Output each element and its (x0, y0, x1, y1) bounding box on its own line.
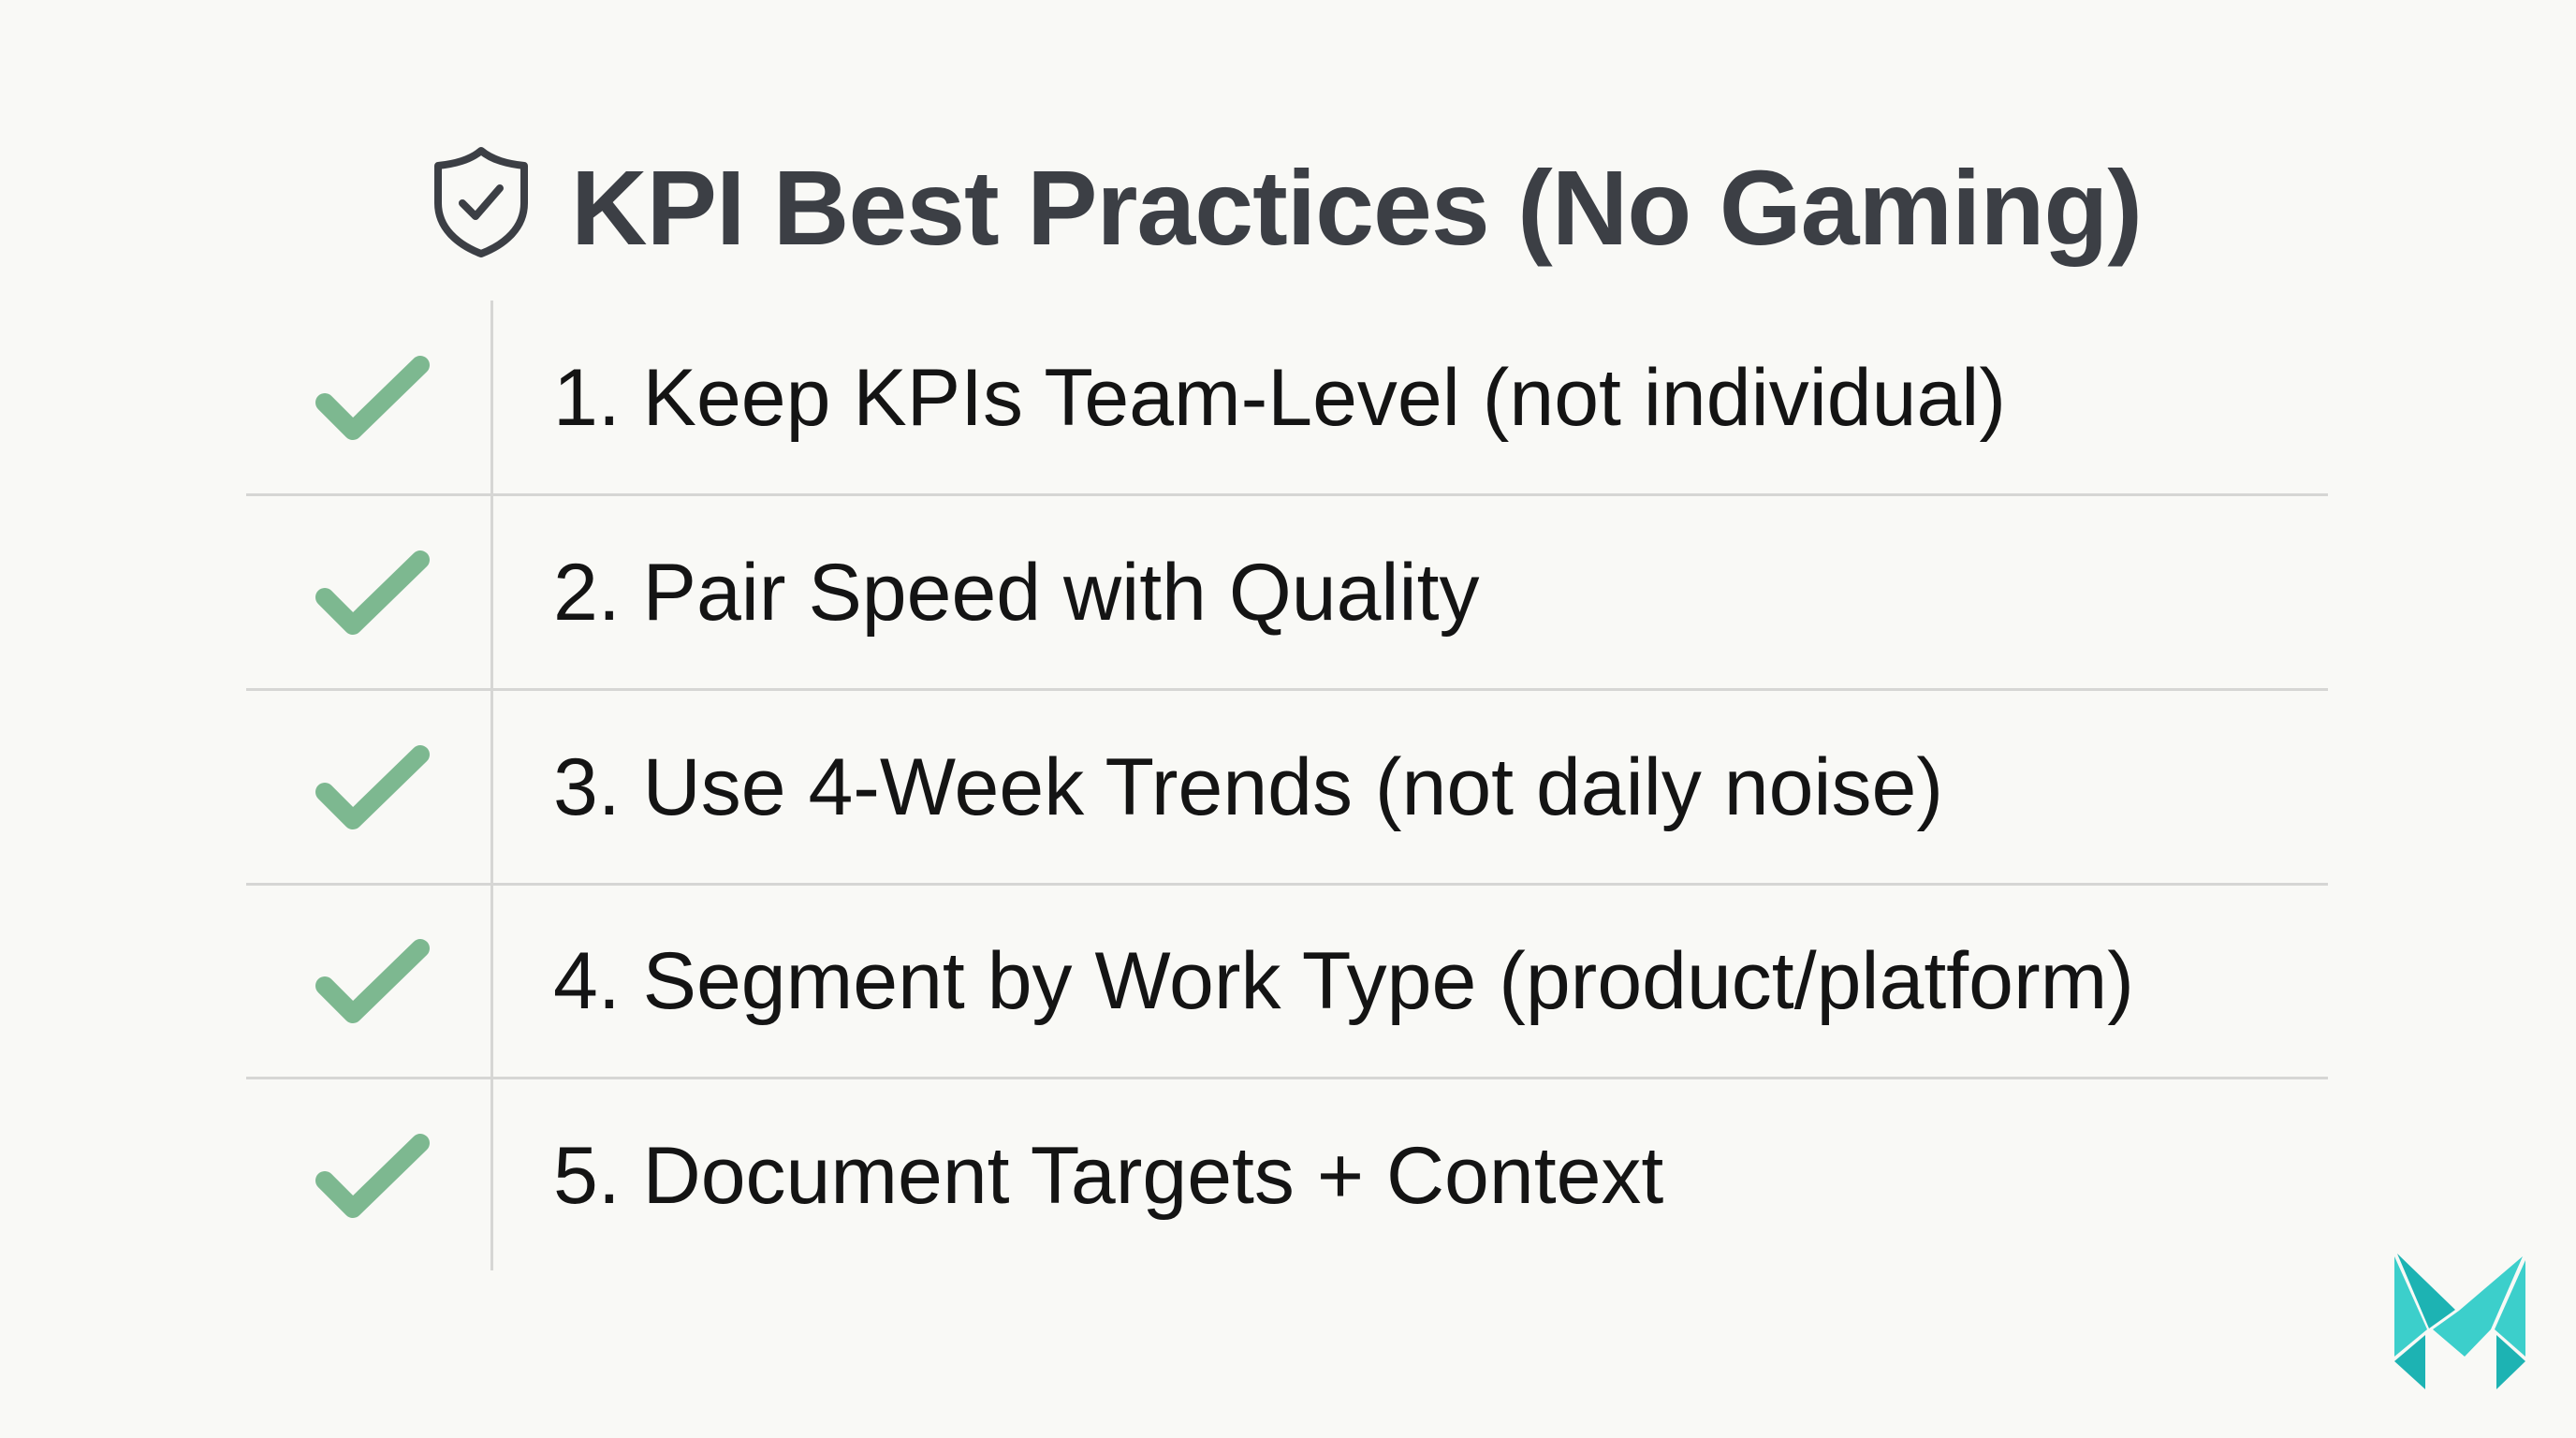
icon: check 2 (315, 550, 430, 635)
icon: check 4 (315, 939, 430, 1023)
text: item 4: 4. Segment by Work Type (product/platform) (553, 936, 2134, 1026)
logo: M (2394, 1254, 2525, 1389)
text: item 3: 3. Use 4-Week Trends (not daily noise) (553, 742, 1943, 832)
vertical divider (490, 301, 493, 1270)
text: item 5: 5. Document Targets + Context (553, 1131, 1663, 1221)
icon: check 1 (315, 356, 430, 440)
row 1 (315, 353, 2006, 443)
icon: check 3 (315, 745, 430, 829)
row 3 (315, 742, 1943, 832)
row 5 (315, 1131, 1663, 1221)
icon: shield (434, 147, 528, 257)
text: item 2: 2. Pair Speed with Quality (553, 548, 1480, 638)
row 2 (315, 548, 1480, 638)
title: KPI Best Practices (No Gaming) (571, 149, 2142, 267)
row 4 (315, 936, 2134, 1026)
icon: check 5 (315, 1134, 430, 1218)
text: item 1: 1. Keep KPIs Team-Level (not individual) (553, 353, 2006, 443)
